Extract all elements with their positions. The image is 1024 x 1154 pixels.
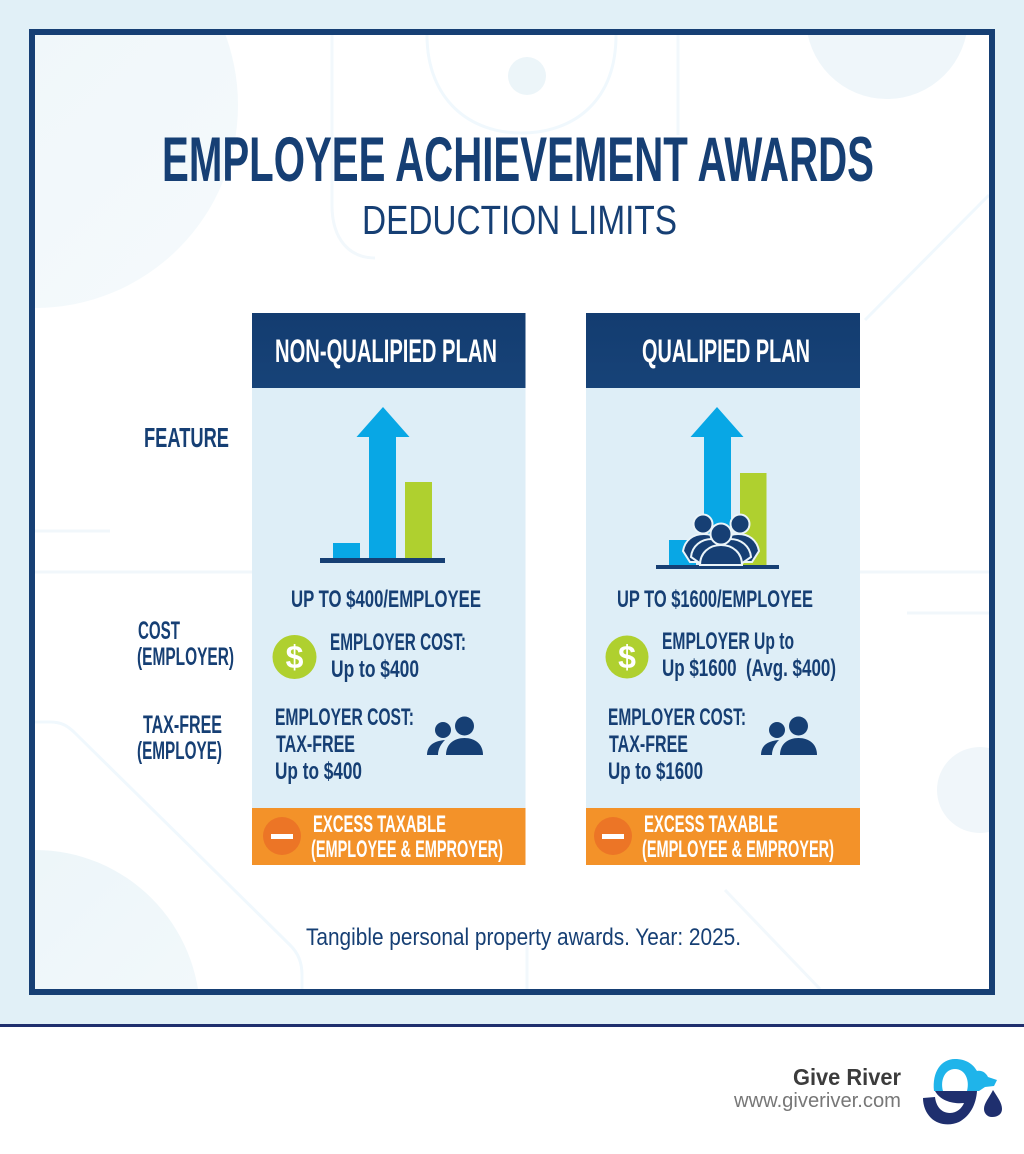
label: feature: FEATURE [144,422,229,453]
footer brand text: www.giveriver.com [733,1090,901,1112]
tax-free text [275,704,414,785]
tax-free text: EMPLOYER COST: [608,704,746,731]
panel: non-qualified plan [252,313,526,865]
label: tax-free employee: TAX-FREE [143,711,222,739]
employer cost text [662,628,836,682]
excess taxable banner [252,808,526,865]
icon: Give River logo [923,1059,1002,1124]
limit text: UP TO $1600/EMPLOYEE [617,586,813,613]
label: tax-free employee: (EMPLOYE) [137,737,222,765]
excess taxable banner: (EMPLOYEE & EMPROYER) [642,836,834,863]
panel header: QUALIPIED PLAN [642,333,810,369]
tax-free text [608,704,746,785]
bar chart with arrow [320,407,445,563]
caption: Tangible personal property awards. Year: 2025. [306,924,741,951]
tax-free text: Up to $1600 [608,758,703,785]
label: tax-free employee [137,711,222,765]
label: cost employer: COST [138,617,180,645]
icon: dollar coin: $ [286,639,304,675]
employer cost text [330,629,466,683]
employer cost text: EMPLOYER Up to [662,628,794,655]
icon: two people [761,716,817,755]
panel header [252,313,526,388]
icon: dollar coin: $ [618,639,636,675]
icon: dollar coin [606,636,648,678]
panel body [586,388,860,808]
tax-free text: Up to $400 [275,758,362,785]
footer brand text: Give River [793,1064,901,1090]
panel: qualified plan [586,313,860,865]
excess taxable banner: EXCESS TAXABLE [313,811,446,838]
footer divider [0,1024,1024,1027]
panel header [586,313,860,388]
excess taxable banner: EXCESS TAXABLE [644,811,778,838]
excess taxable banner [586,808,860,865]
employer cost text: Up to $400 [331,656,419,683]
icon: two people [427,716,483,755]
label: cost employer: (EMPLOYER) [137,643,234,671]
icon: dollar coin [272,635,316,679]
subtitle: DEDUCTION LIMITS [362,197,677,243]
label: cost employer [137,617,234,671]
bar chart with arrow [656,407,779,569]
footer brand text [733,1064,901,1112]
icon: employee group [683,514,759,565]
row labels [137,422,234,765]
tax-free text: EMPLOYER COST: [275,704,414,731]
infographic frame [32,32,992,992]
tax-free text: TAX-FREE [609,731,688,758]
excess taxable banner: (EMPLOYEE & EMPROYER) [311,836,503,863]
employer cost text: EMPLOYER COST: [330,629,466,656]
panel header: NON-QUALIPIED PLAN [275,333,497,369]
employer cost text: Up $1600 (Avg. $400) [662,655,836,682]
panel body [252,388,526,808]
tax-free text: TAX-FREE [276,731,355,758]
limit text: UP TO $400/EMPLOYEE [291,586,481,613]
